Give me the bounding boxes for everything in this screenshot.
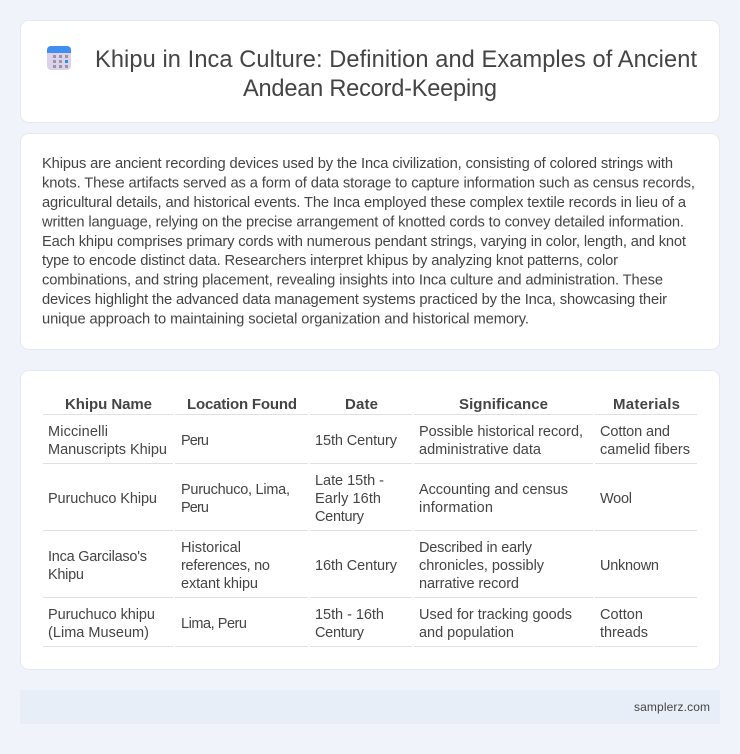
table row: Inca Garcilaso: chronicles, possibly [419,558,545,574]
title: Khipu in Inca Culture: Definition and Examples of Ancient [95,47,697,73]
table row: Puruchuco: information [419,500,493,516]
table row: Puruchuco: Peru [181,500,209,516]
table row: Inca Garcilaso: Described in early [419,540,533,556]
table row: Lima Museum: Used for tracking goods [419,607,572,623]
table row: Inca Garcilaso: Unknown [600,558,659,574]
text block: description: Khipus are ancient recording devices used by the Inca civilization, consisting of colored strings with [42,156,673,172]
table row: Puruchuco: Wool [600,491,632,507]
panel: description card [20,134,720,350]
table row: Lima Museum: Puruchuco khipu [48,607,155,623]
footer [20,690,720,724]
table header: Significance [459,396,548,413]
table header: Materials [613,396,680,413]
text block: description: type to encode distinct data. Researchers interpret khipus by analyzing knot patterns, color [42,253,618,269]
table row: Puruchuco: Early 16th [315,491,381,507]
table row: Inca Garcilaso: Inca Garcilaso's [48,549,147,565]
table row: Puruchuco: Late 15th - [315,473,384,489]
table row: Puruchuco: Century [315,509,365,525]
panel: title card [20,20,720,122]
table row: Miccinelli: camelid fibers [600,442,690,458]
table row: Lima Museum: threads [600,625,648,641]
table row: Lima Museum: Lima, Peru [181,616,247,632]
table row: Lima Museum: Cotton [600,607,643,623]
table row: Puruchuco: Puruchuco, Lima, [181,482,290,498]
table row: Miccinelli: administrative data [419,442,542,458]
table row: Inca Garcilaso [48,540,659,592]
table header: Location Found [187,396,297,413]
table row: Lima Museum: (Lima Museum) [48,625,149,641]
table row: Inca Garcilaso: extant khipu [181,576,258,592]
icon: calendar [47,46,71,70]
table row: Lima Museum [48,607,648,641]
table row: Inca Garcilaso: 16th Century [315,558,398,574]
table row: Lima Museum: 15th - 16th [315,607,384,623]
text block: description: agricultural details, and historical events. The Inca employed these complex textile records in lieu of a [42,195,687,211]
table header [65,396,680,413]
table row: Puruchuco: Puruchuco Khipu [48,491,157,507]
table row: Inca Garcilaso: references, no [181,558,270,574]
table row: Lima Museum: and population [419,625,514,641]
table row: Puruchuco: Accounting and census [419,482,568,498]
table header: Date [345,396,378,413]
footer: samplerz.com [634,700,710,714]
title: Andean Record-Keeping [243,76,497,102]
table row: Inca Garcilaso: Historical [181,540,241,556]
table: khipu examples [43,396,697,647]
table row: Miccinelli: Peru [181,433,209,449]
text block: description [41,156,695,328]
table row: Puruchuco [48,473,632,525]
table row: Lima Museum: Century [315,625,365,641]
table row: Miccinelli: Cotton and [600,424,670,440]
table row: Inca Garcilaso: Khipu [48,567,84,583]
text block: description: written language, relying on the precise arrangement of knotted cords to convey detailed information. [41,214,684,230]
title [95,47,697,102]
table header: Khipu Name [65,396,152,413]
text block: description: unique approach to maintaining societal organization and historical memory. [42,312,529,328]
text block: description: combinations, and string placement, revealing insights into Inca culture and administration. These [42,273,663,289]
table row: Miccinelli: Possible historical record, [419,424,583,440]
table row: Miccinelli [48,424,690,458]
text block: description: Each khipu comprises primary cords with numerous pendant strings, varying in color, length, and knot [42,234,686,250]
panel: table card [20,370,720,670]
text block: description: devices highlight the advanced data management systems practiced by the Inca, showcasing their [42,292,667,308]
table row: Miccinelli: Manuscripts Khipu [48,442,167,458]
table row: Miccinelli: 15th Century [315,433,398,449]
text block: description: knots. These artifacts served as a form of data storage to capture information such as census records, [42,175,695,191]
table row: Miccinelli: Miccinelli [48,424,108,440]
table row: Inca Garcilaso: narrative record [419,576,519,592]
